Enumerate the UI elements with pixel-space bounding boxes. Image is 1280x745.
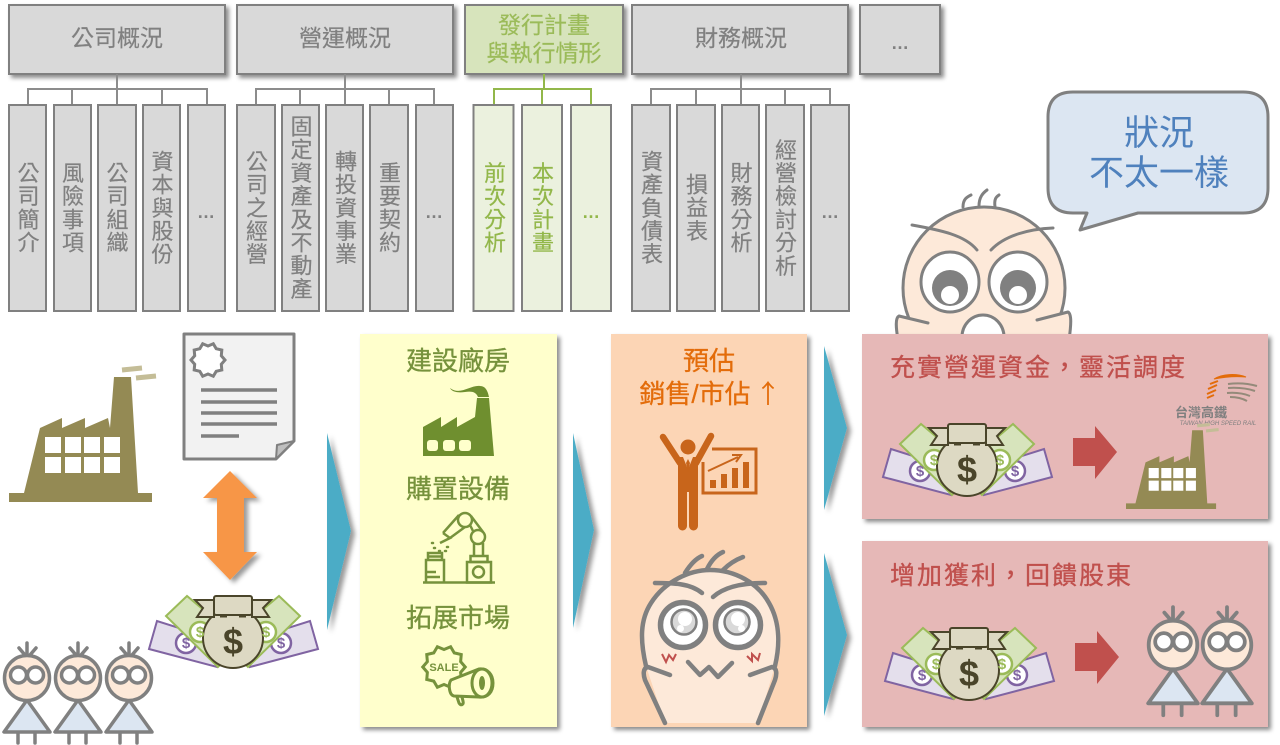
heading box: 發行計畫與執行情形: 發行計畫 — [498, 12, 590, 38]
icon: money bag: $ — [996, 452, 1005, 469]
item: more: … — [425, 202, 443, 222]
speech bubble: 狀況不太一樣: 狀況 — [1124, 114, 1194, 153]
icon: money bag: $ — [930, 452, 939, 469]
arrow: red — [1073, 426, 1117, 479]
item: more — [571, 105, 611, 311]
item: 損益表 — [677, 105, 715, 311]
item: 風險事項 — [54, 105, 91, 311]
panel: working capital — [862, 334, 1268, 519]
icon: money bag: $ — [918, 667, 927, 684]
icon: money bag — [149, 596, 318, 668]
heading box: 公司概況 — [9, 5, 225, 74]
panel: forecast — [611, 334, 807, 727]
item: 前次分析 — [474, 105, 514, 311]
arrow: red — [1075, 631, 1119, 684]
item: 轉投資事業: 轉投資事業 — [332, 150, 357, 266]
icon: money bag: $ — [1013, 667, 1022, 684]
speech bubble: 狀況不太一樣 — [1048, 92, 1268, 230]
item: more: … — [821, 202, 839, 222]
item: 重要契約: 重要契約 — [376, 162, 401, 254]
item: 重要契約 — [370, 105, 408, 311]
item: 風險事項: 風險事項 — [59, 162, 84, 254]
icon: money bag: $ — [1011, 463, 1020, 480]
icon: money bag: $ — [223, 621, 243, 662]
heading: 購置設備: 購置設備 — [406, 474, 510, 504]
icon: green factory — [423, 386, 494, 456]
item: 公司之經營 — [237, 105, 275, 311]
logo: Taiwan High Speed Rail: TAIWAN HIGH SPEED RAIL — [1180, 421, 1256, 427]
heading: 預估銷售/市佔: 預估 — [683, 346, 735, 376]
item: more: … — [197, 202, 215, 222]
arrow: blue chevron 1 — [327, 433, 351, 630]
section: 財務概況 — [632, 5, 849, 311]
icon: three investors — [4, 643, 152, 743]
item: 本次計畫: 本次計畫 — [529, 162, 554, 254]
item: 公司之經營: 公司之經營 — [243, 150, 268, 266]
heading box: 公司概況: 公司概況 — [71, 25, 163, 51]
icon: money bag: $ — [277, 635, 286, 652]
icon: factory — [9, 368, 156, 502]
item: 經營檢討分析: 經營檢討分析 — [772, 138, 797, 278]
panel: fund uses — [360, 334, 557, 727]
item: 資產負債表: 資產負債表 — [638, 150, 663, 266]
heading box: 財務概況 — [632, 5, 848, 74]
arrow: two-way orange — [203, 471, 257, 580]
character: frowning face peeking — [896, 190, 1071, 369]
icon: money bag: $ — [998, 656, 1007, 673]
heading box: 財務概況: 財務概況 — [695, 25, 787, 51]
heading: 增加獲利: 增加獲利，回饋股東 — [890, 562, 1133, 590]
icon: sale megaphone — [423, 647, 493, 705]
item: 經營檢討分析 — [766, 105, 804, 311]
item: 固定資產及不動產: 固定資產及不動產 — [288, 115, 312, 301]
item: 公司簡介 — [9, 105, 46, 311]
heading box: 營運概況 — [237, 5, 453, 74]
item: 公司簡介: 公司簡介 — [14, 162, 40, 254]
item: 財務分析 — [722, 105, 759, 311]
item: 損益表: 損益表 — [683, 173, 708, 243]
item: 固定資產及不動產 — [282, 105, 319, 311]
connector lines — [651, 74, 830, 105]
speech bubble: 狀況不太一樣: 不太一樣 — [1089, 154, 1229, 193]
icon: factory — [1126, 425, 1219, 509]
icon: robot arm — [423, 513, 495, 582]
section: 發行計畫與執行情形 — [465, 5, 623, 311]
arrow: blue chevron 4 — [824, 553, 847, 716]
icon: person with chart — [663, 436, 756, 530]
heading: 拓展市場: 拓展市場 — [406, 603, 510, 633]
connector lines — [28, 74, 207, 105]
heading box: more sections: … — [891, 33, 909, 53]
heading box: 營運概況: 營運概況 — [299, 25, 391, 51]
item: 轉投資事業 — [326, 105, 363, 311]
logo: Taiwan High Speed Rail: 台灣高鐵 — [1175, 405, 1227, 420]
heading: 預估銷售/市佔 — [639, 346, 781, 411]
item: 本次計畫 — [522, 105, 562, 311]
arrow: blue chevron 2 — [573, 433, 594, 628]
item: more — [188, 105, 225, 311]
item: more: … — [582, 202, 600, 222]
item: more — [811, 105, 849, 311]
item: 財務分析: 財務分析 — [728, 162, 752, 254]
heading box: more sections — [860, 5, 940, 74]
section: 公司概況 — [9, 5, 225, 311]
item: 資本與股份 — [143, 105, 180, 311]
heading box: 發行計畫與執行情形: 與執行情形 — [486, 40, 602, 66]
logo: Taiwan High Speed Rail — [1175, 375, 1257, 427]
icon: money bag: $ — [916, 463, 925, 480]
icon: document certificate — [184, 334, 294, 459]
icon: money bag: $ — [196, 624, 205, 641]
connector lines — [494, 74, 591, 105]
item: 前次分析: 前次分析 — [481, 162, 506, 254]
icon: money bag: $ — [957, 449, 977, 490]
heading: 預估銷售/市佔: ↑ — [755, 374, 781, 411]
icon: money bag — [885, 628, 1054, 700]
item: 公司組織: 公司組織 — [104, 162, 128, 254]
icon: money bag: $ — [932, 656, 941, 673]
heading: 建設廠房: 建設廠房 — [406, 346, 510, 376]
panel: returns to shareholders — [862, 541, 1268, 727]
icon: money bag: $ — [182, 635, 191, 652]
character: excited face — [642, 552, 778, 723]
connector lines — [256, 74, 434, 105]
icon: money bag: $ — [959, 653, 979, 694]
icon: money bag: $ — [262, 624, 271, 641]
icon: money bag — [883, 424, 1052, 496]
item: more — [416, 105, 453, 311]
item: 資本與股份: 資本與股份 — [148, 150, 174, 266]
icon: sale megaphone: SALE — [429, 662, 459, 674]
heading: 預估銷售/市佔: 銷售/市佔 — [639, 379, 751, 409]
section: 營運概況 — [237, 5, 453, 311]
arrow: blue chevron 3 — [824, 346, 847, 510]
heading: 充實營運資金: 充實營運資金，靈活調度 — [890, 354, 1187, 382]
heading box: 發行計畫與執行情形 — [465, 5, 623, 74]
item: 資產負債表 — [632, 105, 670, 311]
item: 公司組織 — [98, 105, 136, 311]
icon: two shareholders — [1148, 607, 1252, 715]
